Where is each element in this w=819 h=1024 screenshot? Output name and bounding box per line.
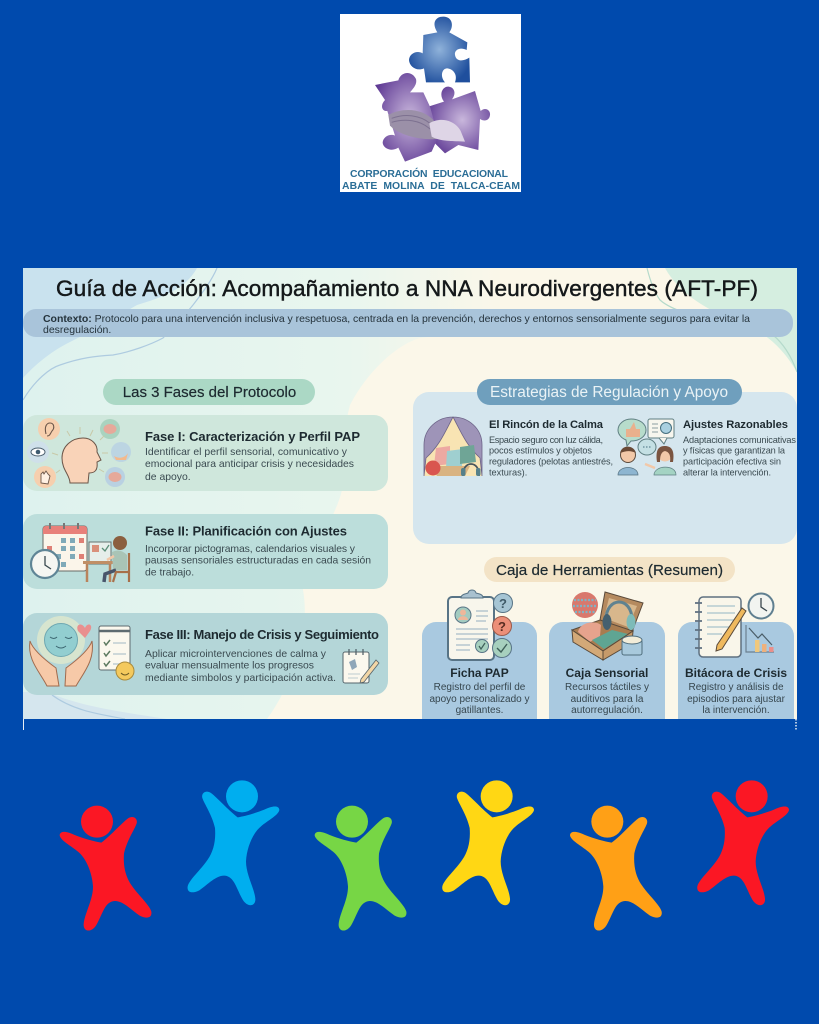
icon: calendar, clock and child at desk bbox=[31, 523, 129, 582]
text: El Rincón de la Calma: texturas). bbox=[489, 468, 527, 478]
text: Ficha PAP: Registro del perfil de bbox=[434, 682, 526, 693]
text: Fase II: Incorporar pictogramas, calendarios visuales y bbox=[145, 544, 356, 555]
text: Bitácora de Crisis bbox=[686, 668, 786, 713]
figure: orange child bbox=[570, 806, 662, 931]
text: Ficha PAP bbox=[429, 666, 530, 716]
text: Ajustes Razonables: alterar la intervención. bbox=[683, 468, 771, 478]
text: Fase II: Fase II: Planificación con Ajustes bbox=[145, 524, 347, 538]
logo: Corporación Educacional bbox=[340, 14, 521, 192]
icon: clipboard: ? bbox=[499, 596, 507, 611]
context bar: desregulación. bbox=[43, 324, 111, 336]
text: Fase II bbox=[145, 524, 371, 578]
logo text: CORPORACIÓN EDUCACIONAL bbox=[350, 167, 509, 180]
panel: Fase III bbox=[23, 613, 388, 695]
text: Ficha PAP: Ficha PAP bbox=[450, 666, 509, 680]
icon: sensory box bbox=[572, 592, 643, 660]
panel: Estrategias de Regulación y Apoyo bbox=[413, 379, 797, 544]
context bar: Contexto: Protocolo para una intervención inclusiva y respetuosa, centrada en la prevención, derechos y entornos sensorialmente seguros para evitar la bbox=[43, 313, 750, 325]
icon: head with senses bbox=[27, 418, 131, 488]
icon: clipboard bbox=[448, 590, 512, 660]
text: El Rincón de la Calma: Espacio seguro con luz cálida, bbox=[489, 435, 603, 445]
text: Ajustes Razonables: Ajustes Razonables bbox=[683, 419, 788, 431]
heading: Caja de Herramientas: Caja de Herramientas (Resumen) bbox=[496, 562, 723, 579]
text: Fase I: emocional para anticipar crisis y necesidades bbox=[145, 459, 354, 470]
icon: logbook, pencil, clock and chart bbox=[695, 594, 774, 657]
heading: Las 3 Fases del Protocolo bbox=[103, 379, 315, 405]
text: Fase III bbox=[145, 627, 379, 684]
text: Bitácora de Crisis: episodios para ajustar bbox=[687, 694, 786, 705]
text: Ajustes Razonables: participación efectiva sin bbox=[683, 456, 781, 466]
panel background bbox=[23, 268, 797, 719]
text: Caja Sensorial bbox=[565, 666, 649, 716]
logo text: ABATE MOLINA DE TALCA-CEAM bbox=[342, 181, 520, 192]
heading: Las 3 Fases del Protocolo: Las 3 Fases del Protocolo bbox=[123, 384, 296, 401]
icon: calm corner bbox=[424, 417, 482, 476]
text: Caja Sensorial: auditivos para la bbox=[571, 694, 644, 705]
figure: green child bbox=[315, 806, 406, 931]
text: Ajustes Razonables: y físicas que garantizan la bbox=[683, 446, 786, 456]
text: El Rincón de la Calma: reguladores (pelotas antiestrés, bbox=[489, 456, 613, 466]
text: Fase II: pausas sensoriales estructuradas en cada sesión bbox=[145, 556, 371, 566]
figure: yellow child bbox=[442, 780, 534, 905]
text: Fase III: Aplicar microintervenciones de calma y bbox=[145, 649, 327, 660]
text: Caja Sensorial: Recursos táctiles y bbox=[565, 682, 649, 693]
text: Fase I: Fase I: Caracterización y Perfil PAP bbox=[145, 429, 360, 444]
logo text bbox=[342, 167, 520, 192]
text: Ficha PAP: gatillantes. bbox=[456, 705, 503, 716]
text: Fase I: de apoyo. bbox=[145, 472, 191, 483]
text: El Rincón de la Calma: pocos estímulos y objetos bbox=[489, 446, 592, 456]
icon: clipboard: ? bbox=[498, 619, 506, 634]
text: Fase III: Fase III: Manejo de Crisis y Seguimiento bbox=[145, 627, 379, 642]
text: Fase III: evaluar mensualmente los progresos bbox=[145, 660, 314, 672]
text: Caja Sensorial: autorregulación. bbox=[571, 705, 643, 716]
text: El Rincón de la Calma bbox=[489, 419, 613, 478]
icon: notepad and pencil bbox=[343, 649, 379, 683]
icon: people talking bbox=[618, 419, 676, 475]
panel: Fase II bbox=[23, 514, 388, 589]
infographic panel bbox=[23, 268, 797, 732]
figure: red child bbox=[60, 806, 151, 931]
text: Fase II: de trabajo. bbox=[145, 568, 194, 578]
text: Fase I: Identificar el perfil sensorial, comunicativo y bbox=[145, 447, 348, 458]
card: Bitácora de Crisis bbox=[678, 594, 794, 732]
text: Bitácora de Crisis: Bitácora de Crisis bbox=[685, 666, 787, 680]
title: Guía de Acción: Acompañamiento a NNA Neurodivergentes (AFT-PF) bbox=[56, 276, 758, 301]
card: Ficha PAP bbox=[422, 590, 537, 732]
text: Fase I bbox=[145, 429, 360, 483]
text: Ajustes Razonables: Adaptaciones comunicativas bbox=[683, 435, 796, 445]
figure: red child right bbox=[697, 780, 789, 905]
text: Fase III: mediante simbolos y participación activa. bbox=[145, 673, 336, 684]
heading: Estrategias: Estrategias de Regulación y Apoyo bbox=[490, 384, 728, 401]
panel: Fase I bbox=[23, 415, 388, 491]
heading: Caja de Herramientas bbox=[484, 557, 735, 582]
text: Ficha PAP: apoyo personalizado y bbox=[429, 694, 530, 705]
icon: puzzle pieces bbox=[375, 17, 490, 162]
text: Caja Sensorial: Caja Sensorial bbox=[566, 666, 648, 680]
figure: blue child bbox=[188, 780, 279, 905]
card: Caja Sensorial bbox=[549, 592, 665, 732]
text: Ajustes Razonables bbox=[683, 419, 796, 478]
context bar bbox=[23, 309, 793, 337]
text: Bitácora de Crisis: Registro y análisis de bbox=[688, 682, 784, 693]
text: Bitácora de Crisis: la intervención. bbox=[702, 705, 770, 716]
heading: Estrategias bbox=[477, 379, 742, 405]
text: El Rincón de la Calma: El Rincón de la Calma bbox=[489, 419, 604, 431]
icon: calm face in hands and checklist bbox=[30, 616, 134, 686]
